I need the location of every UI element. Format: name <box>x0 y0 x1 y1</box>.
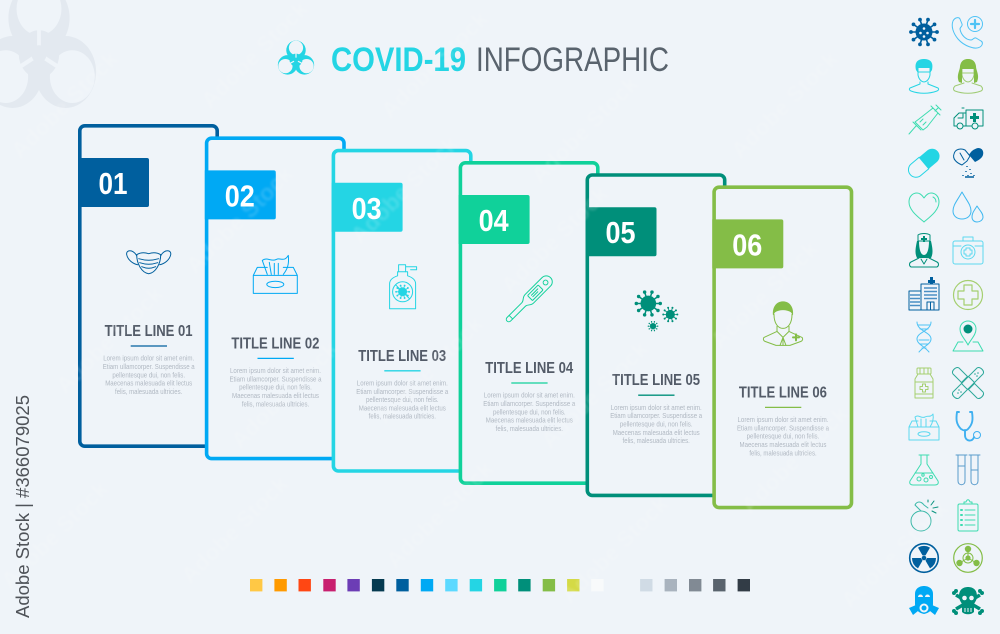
body text <box>483 391 576 433</box>
body text: pellentesque dui, non felis. <box>493 407 566 416</box>
icon: crossed plasters <box>953 368 983 398</box>
heading: INFOGRAPHIC: INFOGRAPHIC <box>476 41 669 79</box>
number badge 05 <box>586 207 656 256</box>
body text: felis, malesuada ultricies. <box>242 399 309 408</box>
icon: hospital <box>909 277 939 310</box>
icon: gas mask <box>909 586 939 615</box>
body text: felis, malesuada ultricies. <box>749 448 817 457</box>
stock id caption: Adobe Stock | #366079025 <box>13 395 33 618</box>
body text: Lorem ipsum dolor sit amet enim. <box>484 391 575 400</box>
icon: woman with mask <box>954 59 982 93</box>
number badge 06: 06 <box>732 227 762 262</box>
body text: felis, malesuada ultricies. <box>623 436 690 445</box>
icon: bomb <box>911 500 938 531</box>
body text: Lorem ipsum dolor sit amet enim. <box>103 354 194 363</box>
watermark text: Adobe Stock <box>370 310 488 428</box>
body text: Maecenas malesuada elit lectus <box>359 403 446 412</box>
icon: heart <box>909 193 939 222</box>
watermark text: Adobe Stock <box>535 335 653 453</box>
icon: virus <box>911 20 937 44</box>
body text: pellentesque dui, non felis. <box>747 432 819 441</box>
body text: Lorem ipsum dolor sit amet enim. <box>230 366 321 375</box>
icon: medicine bottle <box>915 368 933 398</box>
icon: syringe <box>909 105 941 134</box>
title text: TITLE LINE 03 <box>358 348 446 365</box>
body text: Etiam ullamcorper. Suspendisse a <box>103 362 195 371</box>
icon: test tubes <box>956 455 980 485</box>
colour palette <box>250 579 750 591</box>
body text: pellentesque dui, non felis. <box>366 395 439 404</box>
body text: felis, malesuada ultricies. <box>369 412 436 421</box>
icon: chemical molecule <box>954 544 982 572</box>
body text: Etiam ullamcorper. Suspendisse a <box>356 387 449 396</box>
panel: card 04 <box>459 163 598 483</box>
icon: doctor <box>763 301 803 345</box>
panel: card 02 <box>205 138 344 459</box>
panel: card 05 <box>586 175 725 495</box>
number badge 05: 05 <box>606 215 636 250</box>
icon: water drops <box>953 192 983 222</box>
body text: Maecenas malesuada elit lectus <box>232 391 319 400</box>
body text: Lorem ipsum dolor sit amet enim. <box>737 415 828 424</box>
watermark text: Adobe Stock <box>5 45 123 163</box>
body text: Lorem ipsum dolor sit amet enim. <box>611 403 702 412</box>
body text <box>356 378 449 421</box>
title text: TITLE LINE 01 <box>105 323 193 340</box>
body text: Etiam ullamcorper. Suspendisse a <box>230 374 322 383</box>
number badge 01 <box>78 158 149 207</box>
body text <box>610 403 703 445</box>
number badge 03 <box>332 183 403 232</box>
icon: virus particles <box>636 292 677 331</box>
icon: capsule <box>905 146 943 180</box>
watermark text: Adobe Stock <box>725 45 843 163</box>
title text: TITLE LINE 02 <box>231 335 319 352</box>
icon: first aid case <box>953 237 983 264</box>
number badge 04: 04 <box>479 203 509 238</box>
title <box>278 41 669 79</box>
icon: map pin <box>953 321 983 351</box>
panel: card 03 <box>332 151 471 471</box>
body text: Maecenas malesuada elit lectus <box>105 379 192 388</box>
watermark text: Adobe Stock <box>835 495 953 613</box>
icon: stethoscope <box>956 412 980 441</box>
icon: man with mask <box>909 59 939 93</box>
watermark text: Adobe Stock <box>495 180 613 298</box>
watermark text: Adobe Stock <box>175 470 293 588</box>
icon: clipboard <box>958 500 978 531</box>
icon: thermometer <box>503 273 555 325</box>
icon column <box>905 16 983 615</box>
heading: COVID-19: COVID-19 <box>331 41 466 79</box>
watermark text: Adobe Stock <box>345 130 463 248</box>
body text: pellentesque dui, non felis. <box>239 383 312 392</box>
biohazard background mark <box>0 0 96 108</box>
watermark text: Adobe Stock <box>525 70 643 188</box>
icon: ambulance <box>954 108 983 129</box>
body text: pellentesque dui, non felis. <box>112 370 185 379</box>
icon: face mask <box>127 251 171 274</box>
body text: Lorem ipsum dolor sit amet enim. <box>357 378 448 388</box>
icon: radiation <box>910 544 938 572</box>
number badge 04 <box>459 195 530 244</box>
icon: nurse <box>910 234 938 267</box>
icon: flask <box>910 455 938 485</box>
body text: Etiam ullamcorper. Suspendisse a <box>737 423 830 432</box>
number badge 03: 03 <box>352 191 382 226</box>
body text: Maecenas malesuada elit lectus <box>486 416 573 425</box>
body text: Maecenas malesuada elit lectus <box>739 440 827 449</box>
icon: open capsule <box>954 148 983 177</box>
body text: felis, malesuada ultricies. <box>496 424 563 433</box>
watermark text: Adobe Stock <box>180 160 298 278</box>
number badge 06 <box>712 219 783 268</box>
body text: Maecenas malesuada elit lectus <box>613 428 700 437</box>
icon: biohazard <box>278 41 314 75</box>
body text: Etiam ullamcorper. Suspendisse a <box>610 411 703 420</box>
body text <box>103 354 195 396</box>
watermark text: Adobe Stock <box>705 235 823 353</box>
icon: tissue box <box>253 255 297 293</box>
body text: pellentesque dui, non felis. <box>620 420 693 428</box>
body text: felis, malesuada ultricies. <box>115 387 182 396</box>
title text: TITLE LINE 05 <box>612 372 700 389</box>
watermark text: Adobe Stock <box>375 5 493 123</box>
watermark text: Adobe Stock <box>555 490 673 608</box>
icon: tissue box small <box>909 414 939 440</box>
body text <box>737 415 830 457</box>
number badge 01: 01 <box>98 166 128 201</box>
watermark text: Adobe Stock <box>735 400 853 518</box>
icon: skull and crossbones <box>954 587 982 614</box>
icon: phone call <box>952 16 982 48</box>
title text: TITLE LINE 06 <box>739 384 827 401</box>
watermark text: Adobe Stock <box>225 335 343 453</box>
body text: Etiam ullamcorper. Suspendisse a <box>483 399 576 408</box>
number badge 02 <box>205 170 276 219</box>
panel: card 06 <box>712 187 852 508</box>
watermark text: Adobe Stock <box>380 455 498 573</box>
icon: sanitiser bottle <box>390 265 417 309</box>
title text: TITLE LINE 04 <box>485 360 573 377</box>
body text <box>230 366 322 408</box>
watermark text: Adobe Stock <box>50 280 168 398</box>
icon: medical cross <box>954 280 982 310</box>
icon: DNA helix <box>917 322 931 352</box>
number badge 02: 02 <box>225 178 255 213</box>
panel: card 01 <box>78 126 217 446</box>
